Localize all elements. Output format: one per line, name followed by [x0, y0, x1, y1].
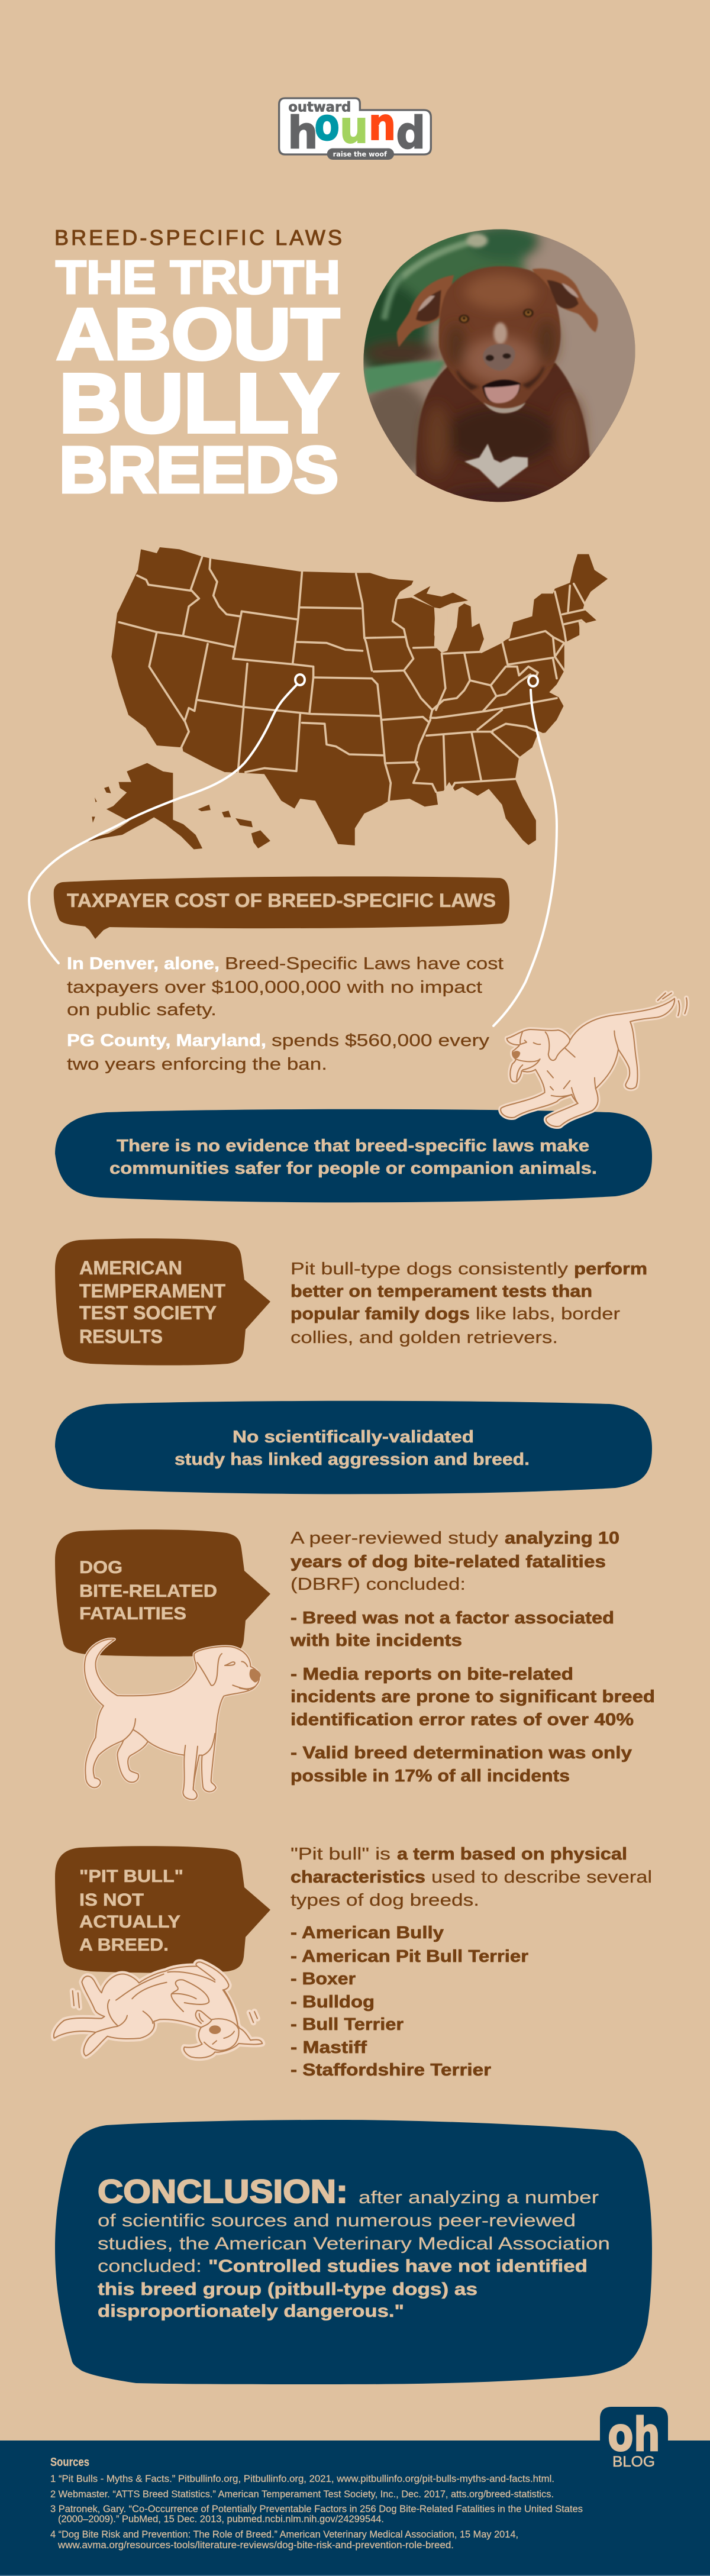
- speech bubble: pit bull is not a breed: [55, 1846, 270, 1973]
- speech bubble: American Temperament Test Society: [55, 1238, 270, 1366]
- finding: valid determination 17%: possible in 17% of all incidents: [291, 1767, 570, 1786]
- text block: pit bull definition: "Pit bull" is: [291, 1845, 390, 1864]
- text block: PG County cost: [67, 1031, 490, 1074]
- finding: valid determination 17%: [291, 1744, 632, 1786]
- blue banner: no validated study: [55, 1401, 652, 1494]
- blue banner: no validated study: No scientifically-validated: [233, 1428, 474, 1447]
- panel: conclusion: [55, 2120, 652, 2384]
- title line: about: ABOUT: [56, 294, 340, 375]
- list: dog breeds: - American Pit Bull Terrier: [291, 1947, 528, 1966]
- logo: oh blog badge: oh: [608, 2409, 660, 2462]
- blue banner: no validated study: study has linked aggression and breed.: [175, 1450, 530, 1469]
- bubble heading: TAXPAYER COST OF BREED-SPECIFIC LAWS: [67, 890, 496, 911]
- text block: temperament results: popular family dogs: [291, 1305, 470, 1323]
- contiguous states silhouette with state borders: [111, 547, 608, 845]
- footer band: [0, 2441, 710, 2576]
- text block: Denver cost: taxpayers over $100,000,000 with no impact: [67, 978, 482, 997]
- head: [439, 266, 561, 413]
- photo: brown pit bull in a round frame: [363, 229, 635, 502]
- logo: Outward Hound: o: [314, 99, 340, 151]
- conclusion body: disproportionately dangerous.": [98, 2301, 404, 2321]
- source 3: [50, 2503, 583, 2525]
- callout line: Denver: [29, 674, 305, 963]
- text block: DBRF study: A peer-reviewed study: [291, 1529, 499, 1548]
- illustration: rolling dog: [54, 1962, 262, 2058]
- speech bubble: American Temperament Test Society: RESULTS: [79, 1326, 163, 1347]
- conclusion body: [98, 2188, 610, 2321]
- text block: DBRF study: analyzing 10: [505, 1529, 619, 1548]
- finding: breed not a factor: [290, 1609, 614, 1650]
- marker: PG County: [528, 676, 538, 686]
- text block: pit bull definition: characteristics: [291, 1868, 425, 1887]
- source 4: [50, 2529, 518, 2551]
- heading block: [54, 225, 342, 506]
- list: dog breeds: - Staffordshire Terrier: [291, 2061, 491, 2080]
- conclusion body: studies, the American Veterinary Medical Association: [98, 2234, 610, 2254]
- logo: Outward Hound: [279, 98, 431, 160]
- map: United States: [87, 547, 608, 850]
- sources heading: Sources: [50, 2456, 89, 2469]
- illustration: standing dog: [85, 1639, 261, 1800]
- mouth: [482, 380, 521, 403]
- text block: pit bull definition: [291, 1845, 652, 1910]
- source 3: 3 Patronek, Gary. “Co-Occurrence of Potentially Preventable Factors in 256 Dog Bite-Related Fatalities in the United States: [50, 2503, 583, 2514]
- logo: Outward Hound: outward: [288, 99, 351, 115]
- right ear: [532, 269, 598, 333]
- finding: media error rates: identification error rates of over 40%: [291, 1710, 634, 1729]
- logo: Outward Hound: raise the woof: [333, 150, 388, 158]
- eyes: [459, 315, 469, 323]
- speech bubble: dog bite-related fatalities: BITE-RELATED: [79, 1581, 217, 1601]
- callout line: PG County: [493, 676, 557, 1026]
- title line: the truth: THE TRUTH: [56, 251, 340, 304]
- source 1: 1 “Pit Bulls - Myths & Facts.” Pitbullinfo.org, Pitbullinfo.org, 2021, www.pitbullinfo.org/pit-bulls-myths-and-facts.html.: [50, 2473, 554, 2484]
- text block: temperament results: Pit bull-type dogs consistently: [291, 1260, 569, 1279]
- conclusion body: concluded:: [98, 2257, 202, 2276]
- speech bubble: taxpayer cost: [54, 876, 509, 939]
- speech bubble: dog bite-related fatalities: FATALITIES: [79, 1604, 186, 1623]
- text block: pit bull definition: types of dog breeds.: [291, 1891, 479, 1910]
- speech bubble: dog bite-related fatalities: [55, 1529, 270, 1657]
- text block: DBRF study: (DBRF) concluded:: [291, 1575, 466, 1594]
- conclusion body: "Controlled studies have not identified: [208, 2257, 588, 2276]
- finding: breed not a factor: with bite incidents: [290, 1631, 462, 1650]
- finding: breed not a factor: - Breed was not a factor associated: [291, 1609, 614, 1628]
- text block: Denver cost: on public safety.: [67, 1000, 217, 1019]
- source 4: 4 “Dog Bite Risk and Prevention: The Role of Breed.” American Veterinary Medical Association, 15 May 2014,: [50, 2529, 518, 2540]
- conclusion body: this breed group (pitbull-type dogs) as: [98, 2280, 477, 2299]
- Alaska and Hawaii: [87, 763, 270, 850]
- speech bubble: pit bull is not a breed: "PIT BULL": [79, 1867, 183, 1886]
- logo: Outward Hound: n: [369, 98, 396, 150]
- text block: PG County cost: PG County, Maryland,: [67, 1031, 266, 1050]
- speech bubble: American Temperament Test Society: TEMPERAMENT: [79, 1280, 225, 1302]
- nose: [483, 344, 515, 371]
- speech bubble: pit bull is not a breed: A BREED.: [79, 1935, 169, 1955]
- speech bubble: American Temperament Test Society: AMERICAN: [79, 1257, 182, 1279]
- list: dog breeds: [291, 1923, 528, 2080]
- left ear: [397, 275, 454, 347]
- speech bubble: pit bull is not a breed: IS NOT: [79, 1890, 144, 1910]
- blue banner: no evidence: communities safer for people or companion animals.: [109, 1159, 597, 1178]
- speech bubble: pit bull is not a breed: ACTUALLY: [79, 1912, 180, 1932]
- speech bubble: dog bite-related fatalities: DOG: [79, 1558, 122, 1577]
- logo: oh blog badge: BLOG: [612, 2454, 655, 2470]
- text block: Denver cost: In Denver, alone,: [67, 954, 220, 973]
- text block: pit bull definition: used to describe several: [431, 1868, 652, 1887]
- text block: PG County cost: spends $560,000 every: [272, 1031, 490, 1050]
- text block: temperament results: collies, and golden retrievers.: [291, 1328, 558, 1347]
- text block: temperament results: like labs, border: [476, 1305, 620, 1323]
- blue banner: no evidence: There is no evidence that breed-specific laws make: [117, 1137, 589, 1155]
- text block: pit bull definition: a term based on physical: [397, 1845, 627, 1864]
- conclusion body: after analyzing a number: [359, 2188, 599, 2207]
- text block: temperament results: perform: [574, 1260, 647, 1279]
- title line: breeds: BREEDS: [59, 434, 338, 506]
- text block: DBRF study: [290, 1529, 655, 1786]
- logo: Outward Hound: h: [288, 107, 318, 159]
- list: dog breeds: - Bull Terrier: [291, 2015, 404, 2034]
- text block: temperament results: better on temperament tests than: [291, 1282, 592, 1301]
- text block: Denver cost: Breed-Specific Laws have cost: [225, 954, 504, 973]
- list: dog breeds: - American Bully: [291, 1923, 444, 1942]
- source 2: 2 Webmaster. “ATTS Breed Statistics.” American Temperament Test Society, Inc., Dec. 2017, atts.org/breed-statistics.: [50, 2488, 554, 2500]
- illustration: play-bowing dog: [501, 993, 687, 1126]
- dog body: [416, 363, 590, 505]
- finding: media error rates: [291, 1665, 655, 1729]
- list: dog breeds: - Bulldog: [291, 1993, 375, 2012]
- conclusion body: of scientific sources and numerous peer-reviewed: [98, 2211, 576, 2230]
- logo: Outward Hound: d: [396, 107, 425, 159]
- source 3: (2000–2009).” PubMed, 15 Dec. 2013, pubmed.ncbi.nlm.nih.gov/24299544.: [58, 2513, 384, 2525]
- text block: Denver cost: [67, 954, 504, 1019]
- text block: temperament results: [291, 1260, 647, 1347]
- finding: media error rates: incidents are prone to significant breed: [291, 1687, 655, 1706]
- eyebrow: breed-specific laws: BREED-SPECIFIC LAWS: [54, 225, 342, 250]
- text block: PG County cost: two years enforcing the ban.: [67, 1055, 327, 1074]
- finding: valid determination 17%: - Valid breed determination was only: [291, 1744, 632, 1762]
- title line: bully: BULLY: [59, 356, 338, 450]
- blue banner: no evidence: [55, 1109, 652, 1202]
- speech bubble: American Temperament Test Society: TEST SOCIETY: [79, 1302, 217, 1323]
- marker: Denver: [295, 674, 305, 685]
- list: dog breeds: - Boxer: [291, 1970, 356, 1989]
- source 4: www.avma.org/resources-tools/literature-reviews/dog-bite-risk-and-prevention-role-breed.: [57, 2539, 454, 2551]
- logo: Outward Hound: u: [340, 101, 368, 153]
- list: dog breeds: - Mastiff: [291, 2038, 367, 2057]
- text block: DBRF study: years of dog bite-related fatalities: [291, 1552, 606, 1571]
- conclusion heading: CONCLUSION:: [98, 2173, 348, 2210]
- finding: media error rates: - Media reports on bite-related: [291, 1665, 573, 1684]
